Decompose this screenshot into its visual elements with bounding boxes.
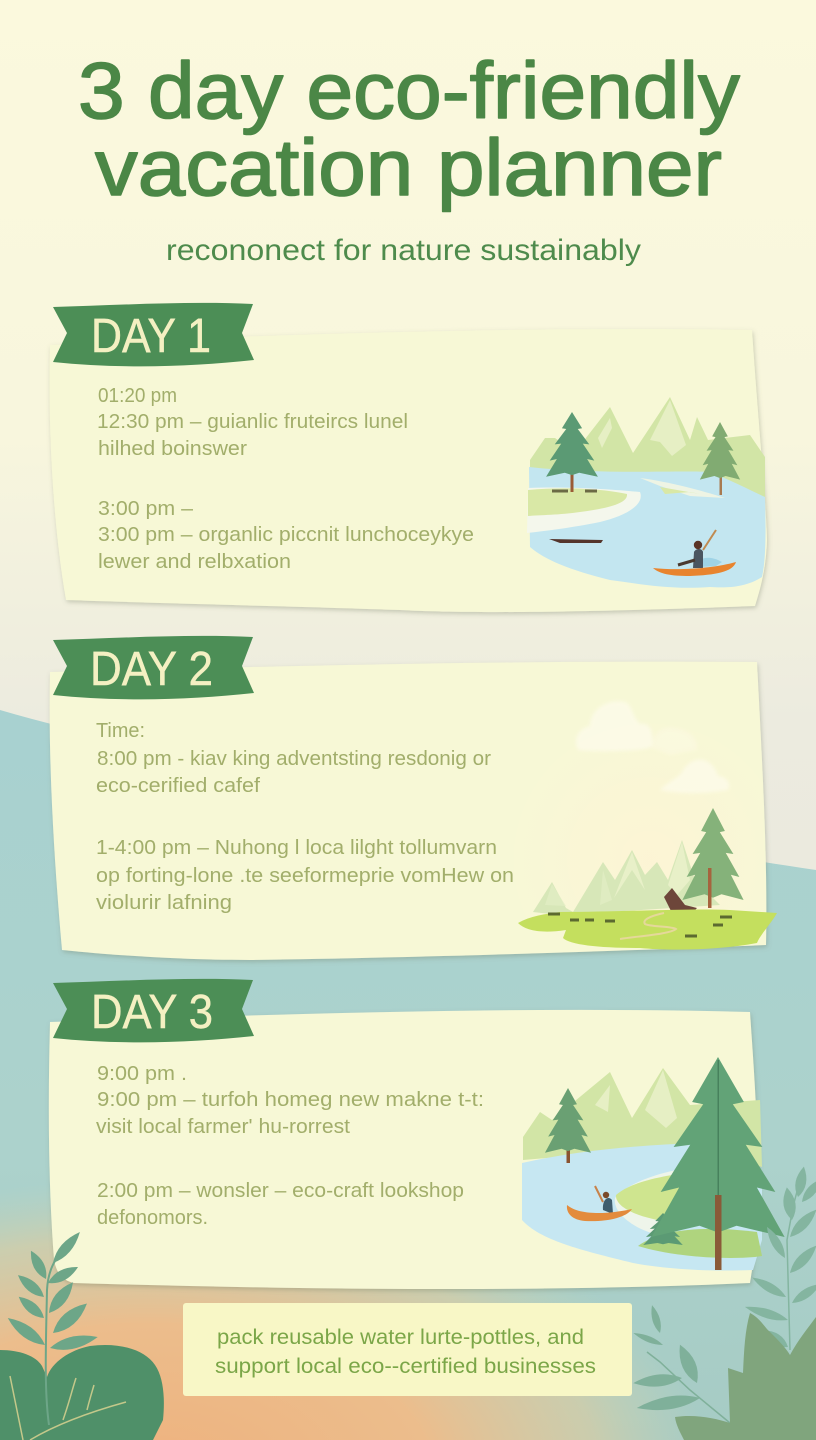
sprig [4,1229,99,1425]
day 1 schedule text [97,385,474,573]
foliage: bottom right [632,1166,816,1440]
day 1 ribbon [53,303,254,366]
pine tree [682,808,744,908]
day 2 schedule text: 1-4:00 pm – Nuhong l loca lilght tollumvarn [96,837,497,859]
day 3 schedule text: 9:00 pm – turfoh homeg new makne t-t: [97,1089,484,1111]
title [78,46,740,212]
day 3 schedule text: visit local farmer' hu-rorrest [96,1116,350,1138]
big pine tree [651,1057,785,1270]
warm glow [490,700,766,940]
panel 3 sheet [49,1010,758,1289]
day 1 schedule text: 12:30 pm – guianlic fruteircs lunel [97,411,408,433]
callout: support local eco--certified businesses [215,1355,596,1378]
day 1 schedule text: 01:20 pm [98,385,177,407]
clouds [576,701,729,793]
sprig lower [632,1304,730,1423]
kayak with paddler [567,1186,632,1221]
panel 2 sheet [50,662,766,960]
pine trees [546,412,740,495]
day 3 ribbon [53,979,254,1042]
day 1 schedule text: 3:00 pm – organlic piccnit lunchoceykye [98,524,474,546]
day 1 ribbon: DAY 1 [91,310,211,363]
day 1 illustration: lake, mountains and kayak [527,397,766,588]
panel: day 2 [50,636,777,960]
day 3 illustration: river, mountains and kayak [522,1057,785,1271]
day 3 ribbon: DAY 3 [91,986,213,1039]
day 3 schedule text: 2:00 pm – wonsler – eco-craft lookshop [97,1180,464,1202]
day 1 schedule text: hilhed boinswer [98,438,247,460]
title: vacation planner [95,123,722,212]
day 2 ribbon: DAY 2 [90,643,213,696]
day 3 schedule text: defonomors. [97,1207,208,1229]
callout [183,1303,632,1396]
rock [664,888,697,913]
panel: day 3 [49,979,785,1289]
day 3 schedule text: 9:00 pm . [97,1063,187,1085]
meadow [518,909,777,950]
small boat [549,539,603,543]
panel: day 1 [50,303,767,612]
day 1 schedule text: lewer and relbxation [98,551,291,573]
day 2 illustration: meadow, mountains and clouds [518,701,777,950]
kayak with paddler [653,530,736,576]
day 3 schedule text [96,1063,484,1229]
panel 1 sheet [50,329,767,612]
title: 3 day eco-friendly [78,46,740,135]
sprig upper [744,1166,816,1351]
subtitle: recononect for nature sustainably [166,234,641,267]
day 2 schedule text [96,720,514,914]
big green leaves [0,1345,164,1440]
day 2 schedule text: 8:00 pm - kiav king adventsting resdonig or [97,748,491,770]
dark bush [675,1313,816,1440]
small pine [545,1088,591,1163]
foliage: bottom left [0,1229,164,1440]
sapling [643,1213,683,1245]
day 1 schedule text: 3:00 pm – [98,498,194,520]
callout: pack reusable water lurte-pottles, and [217,1326,584,1349]
day 2 ribbon [53,636,254,699]
green bank [638,1229,762,1258]
day 2 schedule text: eco-cerified cafef [96,775,260,797]
day 2 schedule text: Time: [96,720,145,742]
day 2 schedule text: violurir lafning [96,892,232,914]
day 2 schedule text: op forting-lone .te seeformeprie vomHew on [96,865,514,887]
